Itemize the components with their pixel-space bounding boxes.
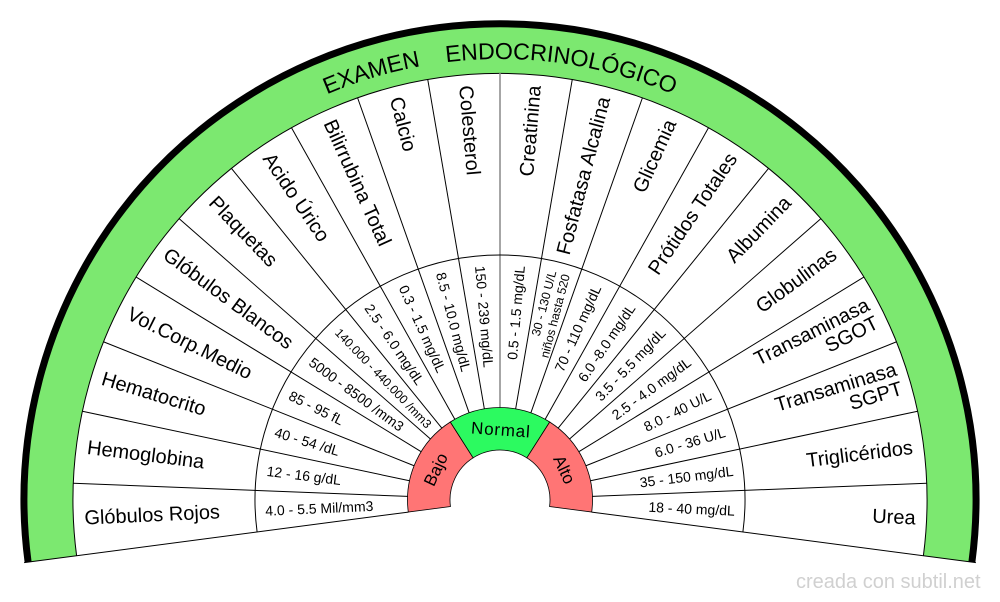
test names: Transaminasa [772, 359, 900, 416]
reference ranges: 35 - 150 mg/dL [639, 463, 734, 490]
reference ranges: 2.5 - 6.0 mg/dL [362, 301, 428, 388]
reference ranges [265, 265, 735, 519]
hub segment: Normal: Normal [470, 418, 531, 442]
reference ranges: 40 - 54 /dL [273, 424, 342, 459]
watermark: creada con subtil.net [796, 571, 981, 593]
hub segment: Alto: Alto [549, 452, 579, 487]
test names: SGPT [847, 378, 905, 415]
test names: Albumina [722, 192, 796, 268]
hub segment: Bajo [408, 422, 473, 512]
test names: Colesterol [454, 85, 484, 176]
table outer edge [73, 73, 927, 556]
test names: Triglicéridos [805, 437, 914, 472]
reference ranges: 8.5 - 10.0 mg/dL [433, 271, 474, 373]
title: EXAMEN ENDOCRINOLÓGICO [322, 42, 676, 94]
test names: Glóbulos Rojos [84, 501, 220, 530]
test names: Creatinina [516, 84, 546, 177]
test names [84, 84, 917, 530]
test names: Glóbulos Blancos [159, 244, 297, 354]
reference ranges: 140.000 - 440.000 /mm3 [332, 326, 434, 431]
hub segment: Normal [450, 408, 550, 458]
reference ranges: 2.5 - 4.0 mg/dL [609, 354, 694, 423]
reference ranges: 70 - 110 mg/dL [551, 282, 604, 374]
test names: Plaquetas [204, 192, 282, 272]
reference ranges: 5000 - 8500 /mm3 [306, 354, 407, 435]
test names: Acido Úrico [258, 149, 334, 246]
test names: Hematocrito [99, 368, 208, 421]
ring separating test names from ranges [255, 255, 745, 532]
test names: Hemoglobina [86, 437, 206, 474]
reference ranges: 6.0 - 36 U/L [653, 424, 727, 461]
reference ranges: niños hasta 520 [538, 272, 573, 359]
reference ranges: 85 - 95 fL [286, 388, 347, 428]
test names: SGOT [822, 312, 882, 357]
reference ranges: 3.5 - 5.5 mg/dL [592, 325, 669, 404]
test names: Glicemia [629, 116, 682, 196]
reference ranges: 0.5 - 1.5 mg/dL [504, 265, 528, 360]
test names: Transaminasa [751, 294, 874, 370]
spokes between sectors [24, 73, 976, 563]
reference ranges: 30 - 130 U/L [529, 269, 559, 338]
reference ranges: 18 - 40 mg/dL [648, 499, 735, 519]
reference ranges: 150 - 239 mg/dL [472, 265, 497, 368]
reference ranges: 8.0 - 40 U/L [641, 387, 714, 435]
test names: Fosfatasa Alcalina [553, 94, 615, 257]
hub segment: Alto [527, 422, 592, 512]
reference ranges: 0.3 - 1.5 mg/dL [396, 283, 449, 375]
test names: Prótidos Totales [644, 149, 742, 279]
test names: Globulinas [752, 244, 841, 318]
reference ranges: 12 - 16 g/dL [266, 463, 342, 488]
reference ranges: 6.0 -8.0 mg/dL [575, 301, 639, 385]
hub segment: Bajo: Bajo [420, 450, 452, 489]
test names: Calcio [385, 95, 420, 154]
test names: Urea [872, 506, 917, 530]
reference ranges: 4.0 - 5.5 Mil/mm3 [265, 498, 374, 519]
test names: Bilirrubina Total [319, 116, 395, 250]
test names: Vol.Corp.Medio [123, 303, 256, 384]
